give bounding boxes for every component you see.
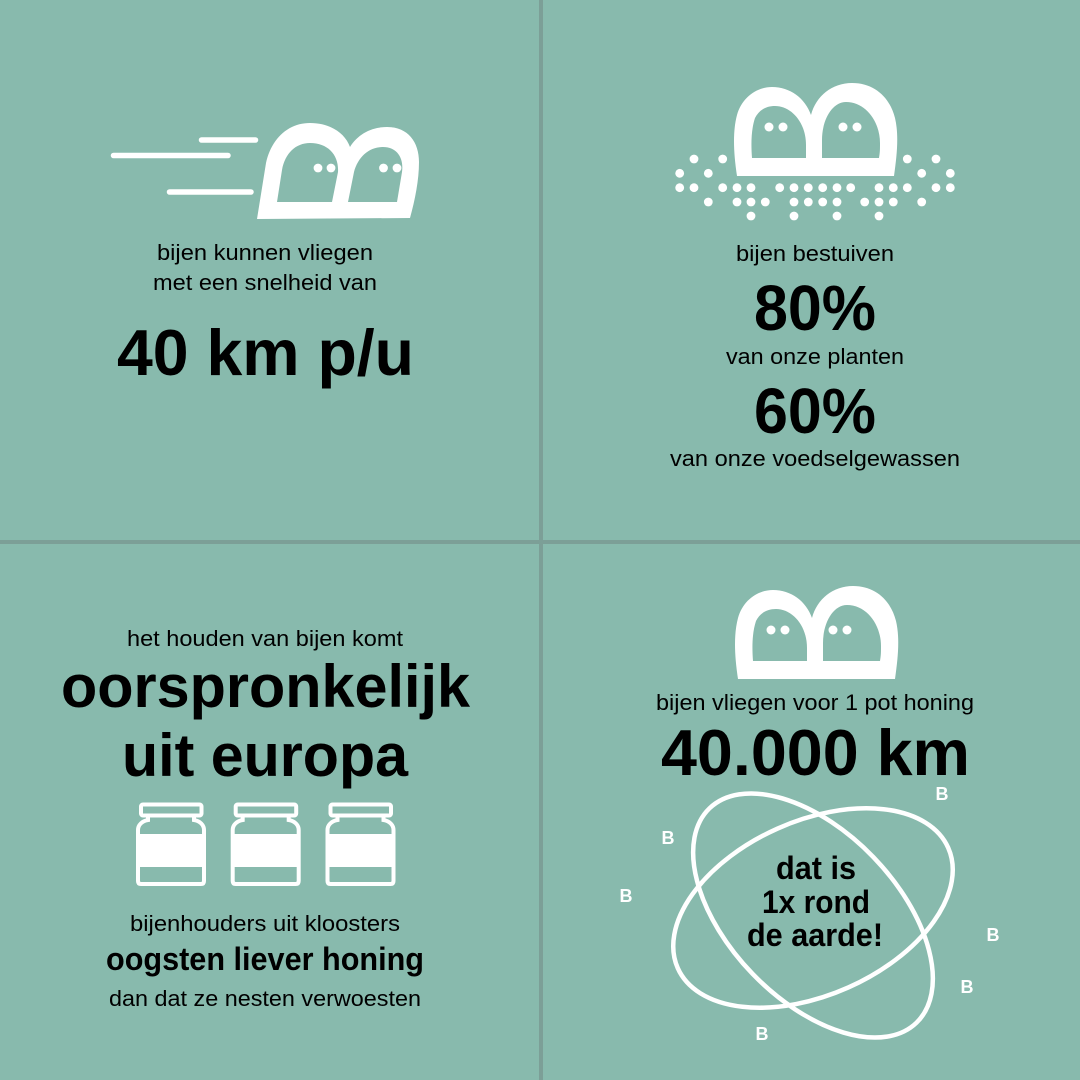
text: of our food crops: van onze voedselgewassen [670, 446, 960, 471]
text: prefer harvesting honey: oogsten liever honing [106, 941, 424, 977]
text: once around the earth: dat is [776, 850, 856, 886]
heading: originally from europe [61, 653, 471, 789]
icon: flying bee with speed lines [114, 123, 419, 219]
icon: small flying B letters: B [620, 886, 632, 906]
icon: three honey jars [138, 804, 394, 884]
text: once around the earth: 1x rond [762, 884, 870, 920]
heading: originally from europe: oorspronkelijk [61, 653, 471, 720]
stat: 60 percent: 60% [754, 375, 876, 447]
text: of our plants: van onze planten [726, 344, 904, 369]
text: speed intro: bijen kunnen vliegen [157, 240, 373, 265]
heading: originally from europe: uit europa [122, 722, 409, 789]
text: pollination intro: bijen bestuiven [736, 241, 894, 266]
icon: small flying B letters: B [662, 828, 674, 848]
text: speed intro [153, 240, 377, 295]
icon: small flying B letters: B [960, 977, 974, 997]
text: rather than destroying nests: dan dat ze nesten verwoesten [109, 986, 421, 1011]
icon: small flying B letters: B [936, 784, 948, 804]
stat: 40 km per hour: 40 km p/u [117, 316, 414, 389]
diagram: orbit ellipses [642, 750, 984, 1080]
text: once around the earth: de aarde! [747, 917, 883, 953]
text: speed intro: met een snelheid van [153, 270, 377, 295]
icon: bee [735, 586, 898, 679]
text: flight distance intro: bijen vliegen voor 1 pot honing [656, 690, 974, 715]
panel: pollination [670, 83, 960, 471]
stat: 40,000 km: 40.000 km [661, 716, 970, 789]
icon: small flying B letters: B [986, 925, 1000, 945]
text: monastery beekeepers: bijenhouders uit kloosters [130, 911, 400, 936]
text: origin intro: het houden van bijen komt [127, 626, 403, 651]
icon: bee over pollen dots [675, 83, 955, 220]
icon: small flying B letters: B [756, 1024, 768, 1044]
panel: flight speed [114, 123, 419, 389]
icon: small flying B letters [620, 784, 1000, 1044]
text: once around the earth [747, 850, 883, 953]
panel: distance for honey [620, 586, 1000, 1080]
stat: 80 percent: 80% [754, 272, 876, 344]
panel: beekeeping origin [61, 626, 471, 1011]
